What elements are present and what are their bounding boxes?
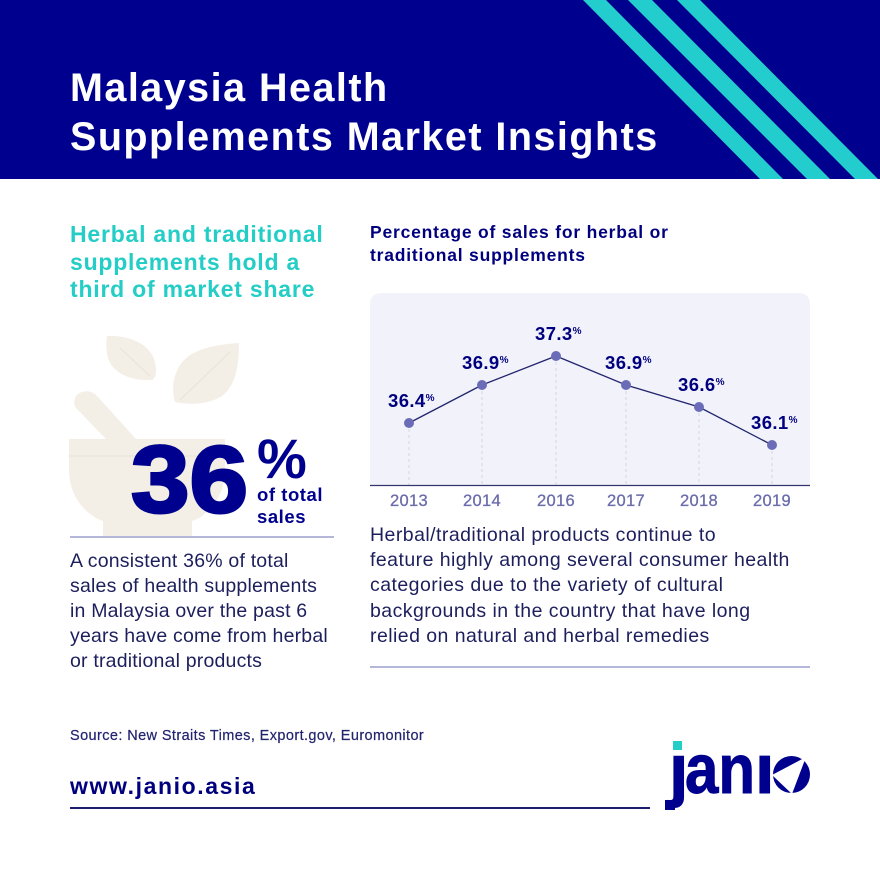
line chart: 36.1	[751, 412, 789, 433]
left heading: supplements hold a	[70, 248, 300, 274]
right body text: Herbal/traditional products continue to	[370, 524, 716, 546]
line chart: 2016	[537, 492, 575, 510]
line chart: 2014	[463, 492, 501, 510]
line chart: 2013	[390, 492, 428, 510]
left heading: Herbal and traditional	[70, 221, 324, 247]
title: Supplements Market Insights	[70, 115, 659, 159]
footer line	[70, 807, 650, 809]
stat caption: of total	[257, 484, 323, 505]
line chart: 2017	[607, 492, 645, 510]
line chart: 2019	[753, 492, 791, 510]
chart heading	[370, 222, 669, 265]
source: Source: New Straits Times, Export.gov, Euromonitor	[70, 728, 424, 744]
line chart: 36.9	[605, 352, 643, 373]
right body text: relied on natural and herbal remedies	[370, 625, 710, 647]
logo: janio: ȷ	[667, 730, 688, 808]
line chart: 2018	[680, 492, 718, 510]
chart heading: traditional supplements	[370, 245, 586, 265]
line chart: %	[426, 393, 435, 404]
right divider	[370, 666, 810, 668]
line chart: 37.3	[535, 323, 573, 344]
logo: janio: ı	[755, 730, 774, 808]
stat caption: sales	[257, 506, 306, 526]
left body text	[70, 550, 328, 672]
chart heading: Percentage of sales for herbal or	[370, 222, 669, 242]
title: Malaysia Health	[70, 66, 389, 110]
line chart	[370, 293, 810, 510]
left body text: in Malaysia over the past 6	[70, 600, 307, 622]
line chart: %	[500, 355, 509, 366]
right body text: categories due to the variety of cultural	[370, 574, 723, 596]
website: www.janio.asia	[70, 773, 256, 799]
line chart: %	[573, 326, 582, 337]
right body text: backgrounds in the country that have long	[370, 600, 751, 622]
line chart: %	[789, 415, 798, 426]
left heading: third of market share	[70, 276, 315, 302]
line chart: 36.6	[678, 374, 716, 395]
left divider	[70, 536, 334, 538]
big stat 36: 36	[131, 427, 248, 533]
logo: janio: an	[685, 730, 755, 808]
title	[70, 66, 659, 159]
percent sign: %	[257, 427, 307, 490]
left body text: years have come from herbal	[70, 625, 328, 647]
left body text: A consistent 36% of total	[70, 550, 289, 572]
line chart: 36.4	[388, 390, 426, 411]
left heading	[70, 221, 324, 302]
stat caption	[257, 484, 323, 526]
right body text	[370, 524, 790, 647]
left body text: sales of health supplements	[70, 575, 317, 597]
header banner	[0, 0, 880, 179]
left body text: or traditional products	[70, 650, 262, 672]
right body text: feature highly among several consumer health	[370, 549, 790, 571]
line chart: %	[643, 355, 652, 366]
line chart: %	[716, 377, 725, 388]
icon: mortar, pestle and leaves	[69, 336, 239, 536]
line chart: 36.9	[462, 352, 500, 373]
